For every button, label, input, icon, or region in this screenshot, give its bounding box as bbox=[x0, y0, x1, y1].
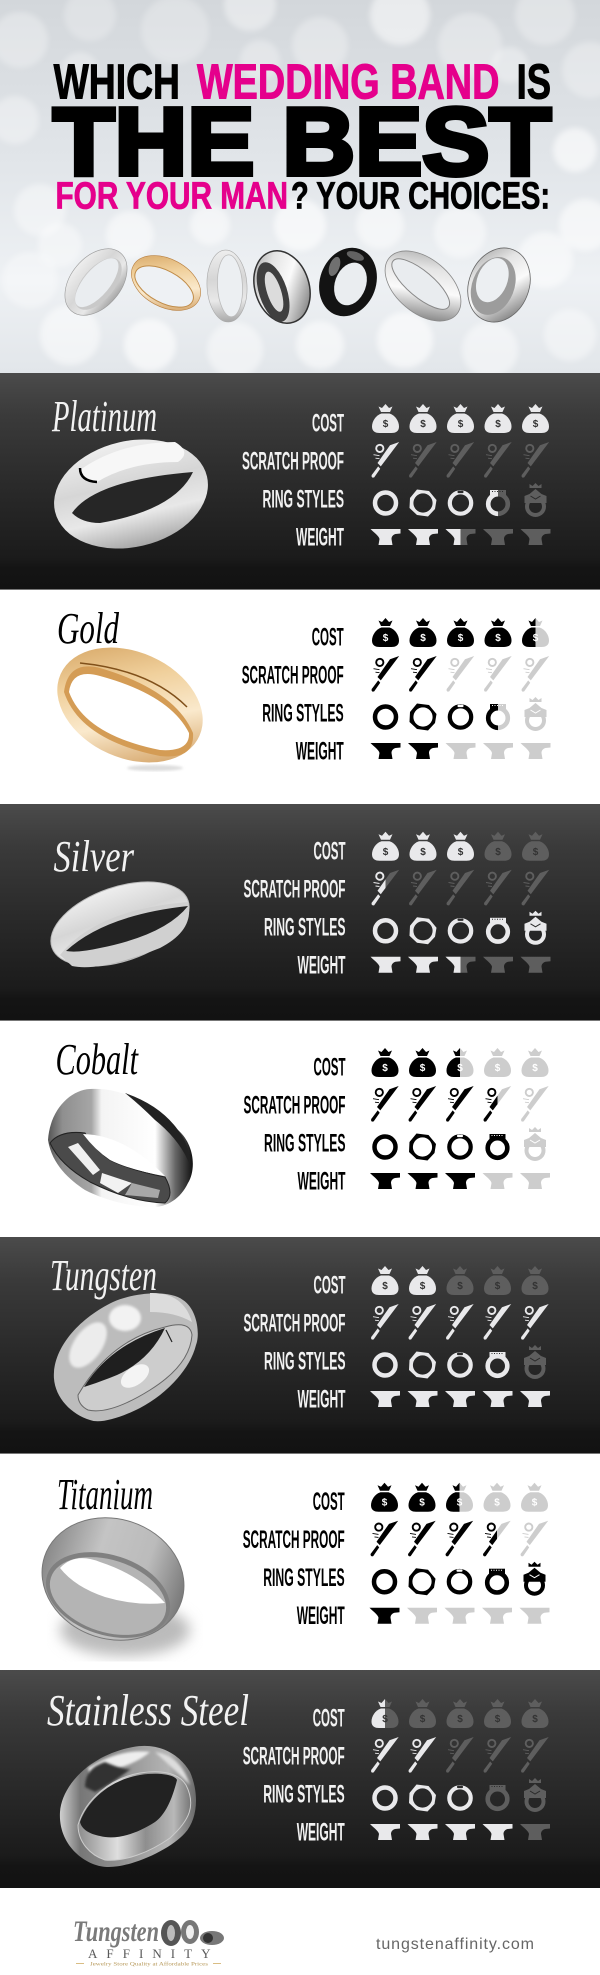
weight row bbox=[296, 528, 550, 546]
seven ring lineup bbox=[52, 237, 541, 335]
footer logo: Tungsten bbox=[73, 1915, 159, 1948]
cost row: $ bbox=[457, 1714, 463, 1725]
cost row: COST bbox=[312, 410, 344, 438]
bokeh background bbox=[0, 0, 600, 378]
cost row: $ bbox=[419, 1498, 425, 1509]
panel: Tungsten bbox=[0, 1237, 600, 1454]
cost row bbox=[314, 1266, 548, 1300]
cost row: COST bbox=[314, 1272, 346, 1300]
name: Cobalt: Cobalt bbox=[56, 1035, 139, 1084]
footer logo: AFFINITY bbox=[88, 1946, 211, 1961]
ring styles row bbox=[263, 1778, 546, 1812]
title: IS bbox=[517, 56, 551, 110]
ring photo: tungsten bbox=[54, 1293, 198, 1421]
ratings: Tungsten bbox=[244, 1266, 550, 1414]
name: Stainless Steel: Stainless Steel bbox=[47, 1686, 249, 1735]
cost row: $ bbox=[420, 419, 426, 430]
weight row bbox=[297, 1818, 550, 1846]
title: THE BEST bbox=[53, 88, 551, 196]
ratings: Silver bbox=[244, 832, 550, 979]
cost row: $ bbox=[532, 1281, 538, 1292]
cost row: $ bbox=[495, 1281, 501, 1292]
cost row: $ bbox=[532, 1714, 538, 1725]
cost row: $ bbox=[495, 633, 501, 644]
name: Silver: Silver bbox=[54, 832, 135, 881]
panel: Platinum bbox=[0, 373, 600, 590]
weight row: WEIGHT bbox=[296, 524, 344, 552]
scratch proof row bbox=[244, 870, 549, 905]
ring styles row bbox=[264, 911, 546, 944]
cost row: $ bbox=[458, 419, 464, 430]
cost row: $ bbox=[495, 1714, 501, 1725]
logo rings bbox=[161, 1920, 224, 1946]
cost row: $ bbox=[458, 847, 464, 858]
ring styles row: RING STYLES bbox=[264, 1348, 346, 1376]
ring styles row: RING STYLES bbox=[264, 913, 346, 941]
scratch proof row bbox=[244, 1304, 549, 1340]
cost row: $ bbox=[494, 1498, 500, 1509]
scratch proof row bbox=[242, 656, 549, 692]
cost row: $ bbox=[457, 1281, 463, 1292]
scratch proof row: SCRATCH PROOF bbox=[242, 448, 344, 476]
panel: Stainless Steel bbox=[0, 1670, 600, 1888]
weight row: WEIGHT bbox=[298, 951, 346, 979]
name: Gold: Gold bbox=[57, 604, 120, 653]
ring styles row bbox=[262, 697, 546, 730]
cost row: $ bbox=[532, 1063, 538, 1074]
ratings: Gold bbox=[242, 618, 550, 766]
cost row: COST bbox=[314, 837, 346, 865]
scratch proof row bbox=[243, 1521, 548, 1556]
scratch proof row: SCRATCH PROOF bbox=[243, 1742, 345, 1770]
cost row: $ bbox=[420, 1714, 426, 1725]
weight row bbox=[298, 1168, 550, 1196]
ring styles row: RING STYLES bbox=[262, 700, 344, 728]
panel: Silver bbox=[0, 804, 600, 1021]
name: Tungsten: Tungsten bbox=[50, 1251, 157, 1300]
ratings: Stainless Steel bbox=[243, 1699, 550, 1846]
footer logo bbox=[73, 1915, 224, 1968]
cost row: $ bbox=[495, 847, 501, 858]
cost row: $ bbox=[383, 633, 389, 644]
cost row: $ bbox=[420, 633, 426, 644]
cost row: $ bbox=[533, 633, 539, 644]
ring styles row bbox=[263, 1562, 546, 1595]
title: WEDDING BAND bbox=[197, 56, 499, 110]
weight row bbox=[298, 956, 550, 974]
cost row bbox=[312, 404, 549, 438]
ring photo: gold bbox=[39, 626, 221, 784]
cost row: $ bbox=[533, 419, 539, 430]
cost row: COST bbox=[312, 624, 344, 652]
cost row: $ bbox=[457, 1063, 463, 1074]
cost row: COST bbox=[313, 1488, 345, 1516]
scratch proof row: SCRATCH PROOF bbox=[244, 1310, 346, 1338]
weight row bbox=[298, 1386, 550, 1414]
panel: Gold bbox=[57, 612, 550, 772]
weight row bbox=[296, 738, 550, 766]
cost row: COST bbox=[314, 1054, 346, 1082]
cost row: $ bbox=[420, 847, 426, 858]
cost row bbox=[313, 1482, 548, 1512]
weight row: WEIGHT bbox=[297, 1602, 345, 1630]
ring photo: platinum bbox=[43, 425, 219, 563]
ring styles row: RING STYLES bbox=[263, 1780, 345, 1808]
cost row: $ bbox=[383, 847, 389, 858]
cost row: $ bbox=[383, 419, 389, 430]
ring styles row: RING STYLES bbox=[264, 1130, 346, 1158]
footer logo: Jewelry Store Quality at Affordable Prices bbox=[90, 1960, 208, 1968]
panel: Titanium bbox=[42, 1480, 550, 1662]
panel: Cobalt bbox=[48, 1043, 550, 1207]
cost row bbox=[314, 1048, 548, 1077]
cost row: $ bbox=[382, 1714, 388, 1725]
ring styles row bbox=[264, 1127, 546, 1160]
ring styles row: RING STYLES bbox=[263, 1564, 345, 1592]
cost row: COST bbox=[313, 1704, 345, 1732]
scratch proof row bbox=[242, 442, 549, 478]
scratch proof row bbox=[243, 1737, 549, 1773]
cost row bbox=[314, 832, 549, 865]
cost row: $ bbox=[457, 1498, 463, 1509]
cost row: $ bbox=[382, 1281, 388, 1292]
ring styles row bbox=[262, 483, 546, 516]
cost row: $ bbox=[420, 1281, 426, 1292]
cost row: $ bbox=[532, 1498, 538, 1509]
cost row: $ bbox=[495, 1063, 501, 1074]
title bbox=[53, 56, 551, 218]
ring photo: stainless steel bbox=[60, 1746, 196, 1867]
footer website: tungstenaffinity.com bbox=[376, 1936, 534, 1953]
ring styles row: RING STYLES bbox=[262, 486, 344, 514]
scratch proof row: SCRATCH PROOF bbox=[242, 662, 344, 690]
cost row bbox=[313, 1699, 548, 1728]
scratch proof row: SCRATCH PROOF bbox=[244, 1092, 346, 1120]
cost row: $ bbox=[533, 847, 539, 858]
ratings: Platinum bbox=[242, 404, 550, 552]
cost row: $ bbox=[458, 633, 464, 644]
ring photo: silver bbox=[40, 866, 200, 982]
weight row: WEIGHT bbox=[298, 1168, 346, 1196]
title: FOR YOUR MAN bbox=[56, 176, 288, 218]
ring photo: cobalt bbox=[48, 1089, 193, 1207]
cost row: $ bbox=[420, 1063, 426, 1074]
scratch proof row: SCRATCH PROOF bbox=[244, 875, 346, 903]
title: WHICH bbox=[54, 56, 180, 110]
cost row: $ bbox=[382, 1063, 388, 1074]
ring photo: titanium bbox=[26, 1500, 200, 1658]
name: Platinum: Platinum bbox=[51, 392, 157, 441]
scratch proof row: SCRATCH PROOF bbox=[243, 1526, 345, 1554]
weight row: WEIGHT bbox=[297, 1818, 345, 1846]
scratch proof row bbox=[244, 1086, 549, 1122]
weight row: WEIGHT bbox=[298, 1386, 346, 1414]
cost row: $ bbox=[382, 1498, 388, 1509]
header panel bbox=[0, 0, 600, 378]
cost row: $ bbox=[495, 419, 501, 430]
name: Titanium: Titanium bbox=[57, 1470, 153, 1519]
weight row bbox=[297, 1602, 550, 1630]
cost row bbox=[312, 618, 549, 647]
ring styles row bbox=[264, 1345, 546, 1378]
ratings: Cobalt bbox=[244, 1048, 550, 1196]
weight row: WEIGHT bbox=[296, 738, 344, 766]
ratings: Titanium bbox=[243, 1483, 549, 1630]
